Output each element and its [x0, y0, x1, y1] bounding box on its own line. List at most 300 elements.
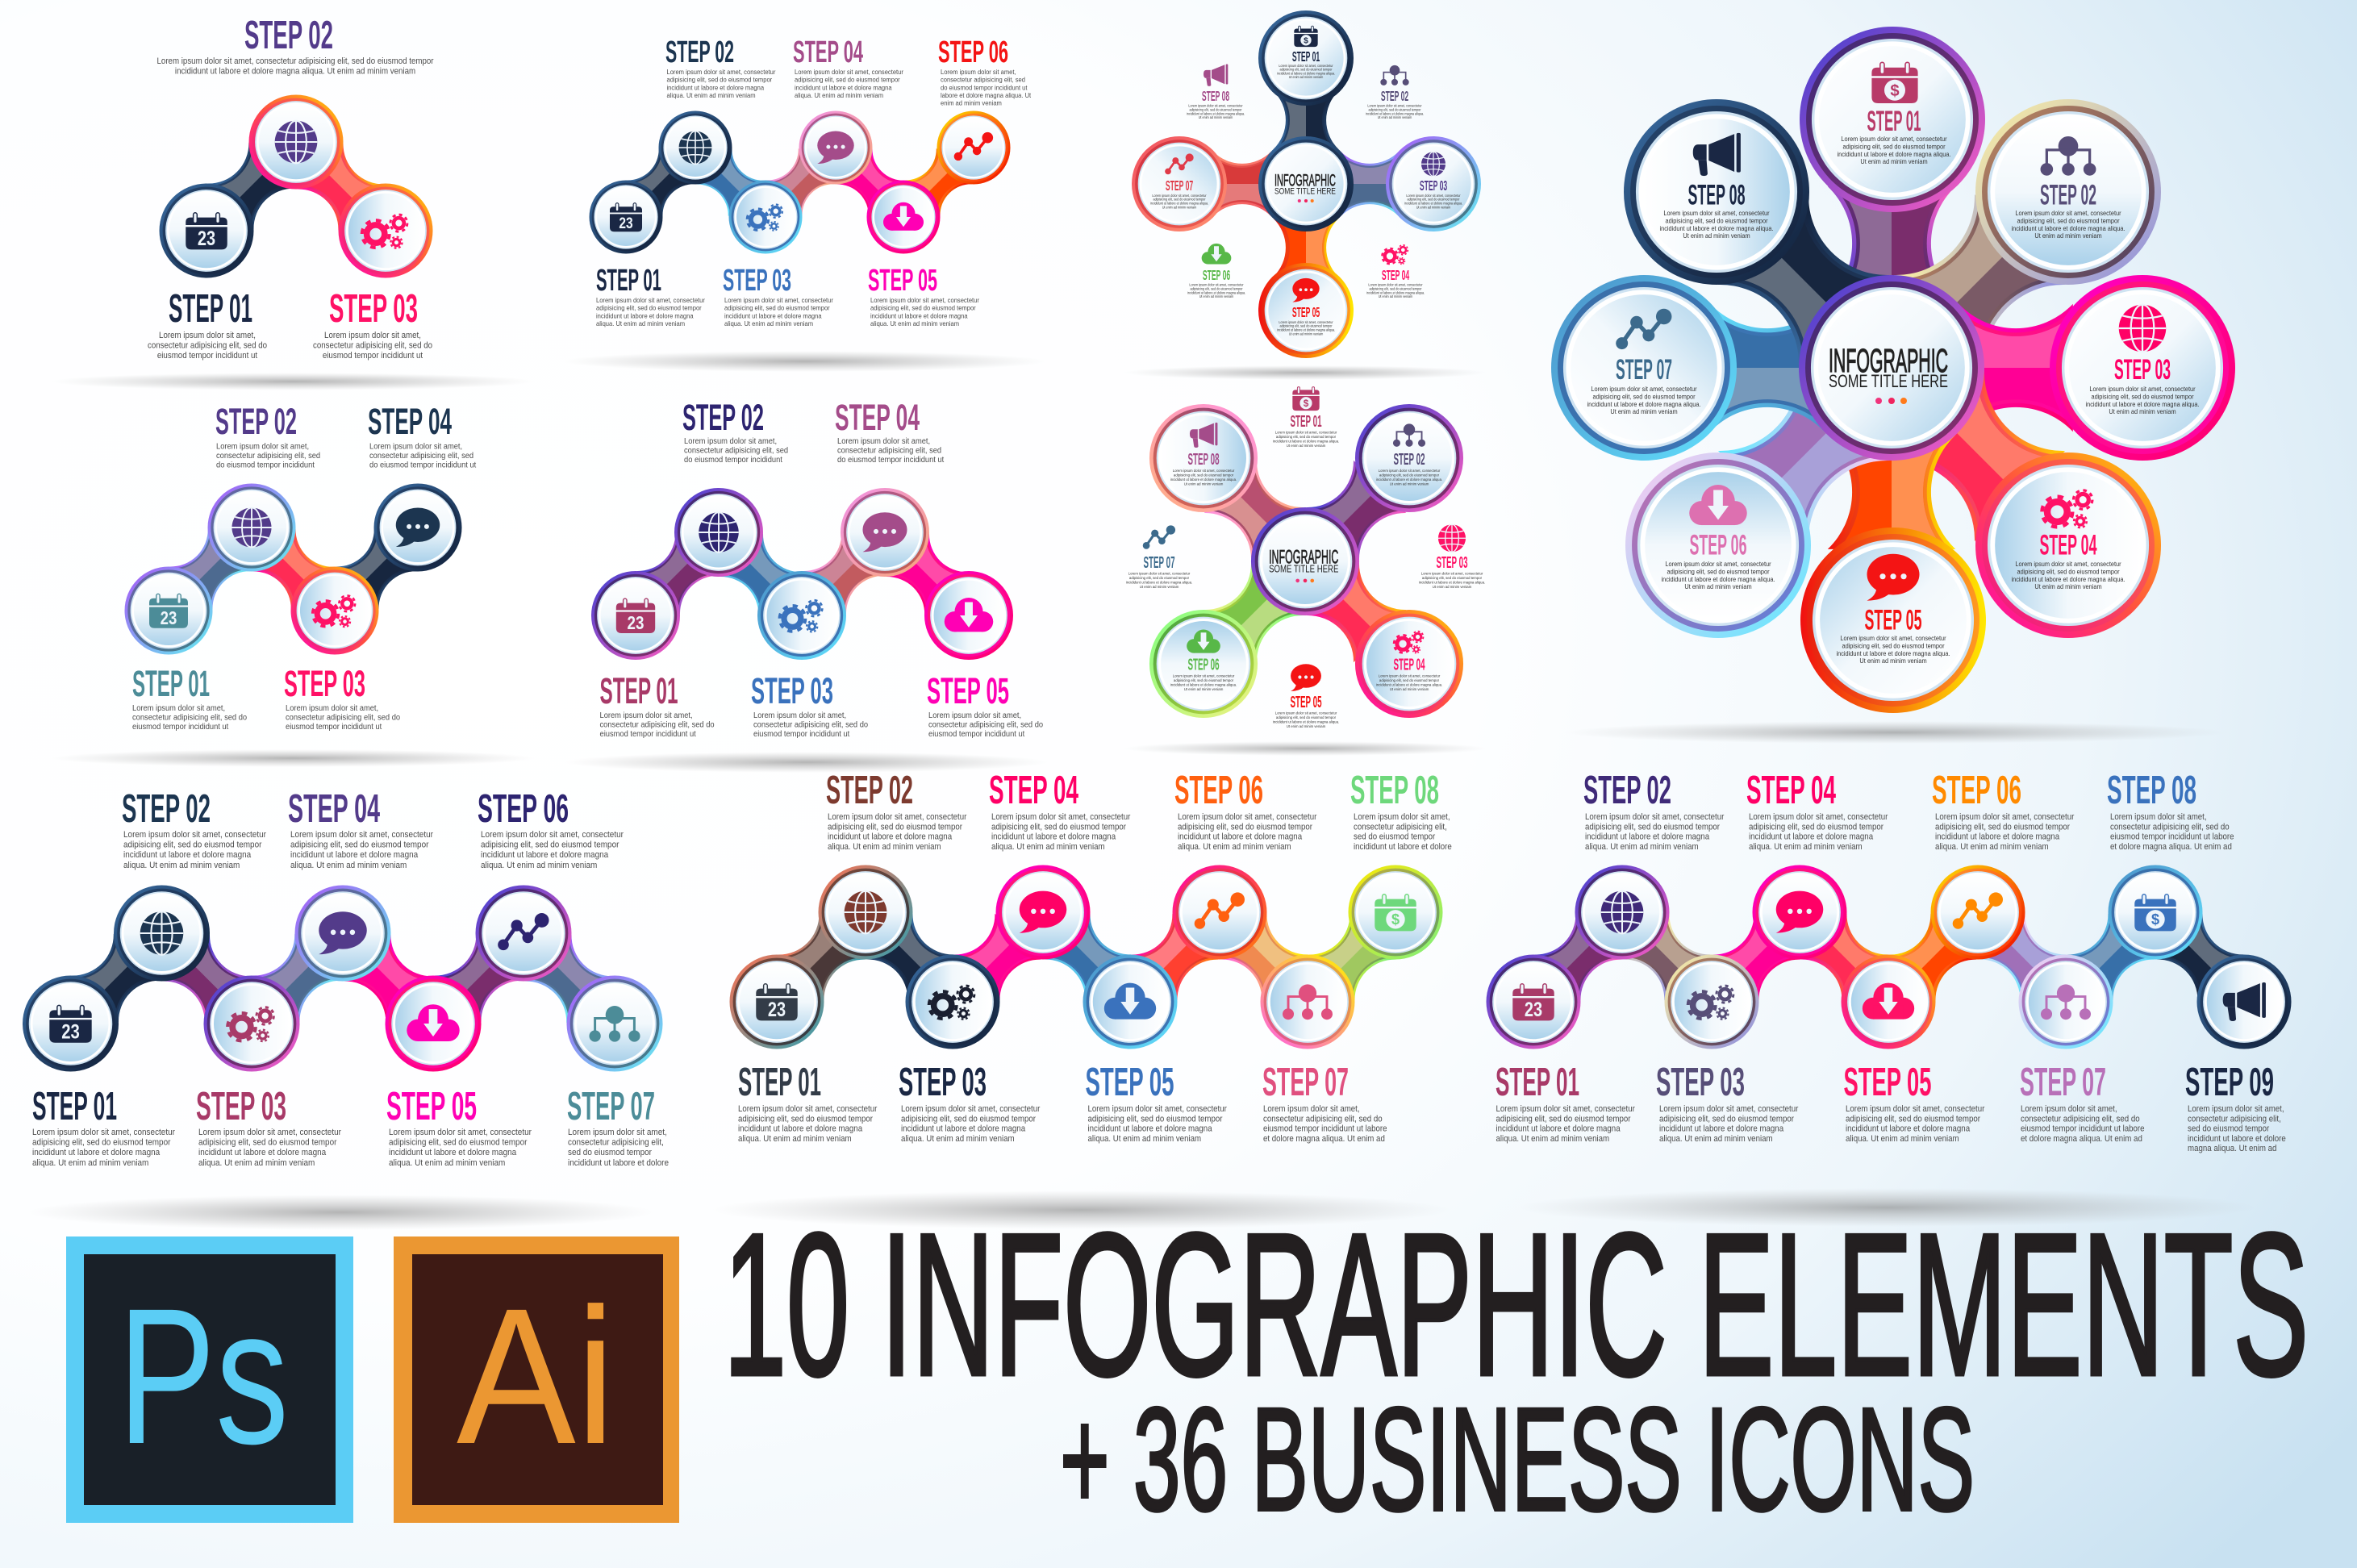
step 07: et dolore magna aliqua. Ut enim ad [2021, 1134, 2142, 1144]
step 04: STEP 04 [835, 397, 920, 438]
step 05: aliqua. Ut enim ad minim veniam [389, 1158, 506, 1168]
node: step 03: Lorem ipsum dolor sit amet, consectetur [2089, 386, 2196, 393]
node: step 08 [1149, 404, 1258, 512]
step 08: et dolore magna aliqua. Ut enim ad [2110, 842, 2232, 852]
connectors [206, 141, 386, 231]
node: gears [905, 955, 1000, 1049]
node: step 03: adipisicing elit, sed do eiusmod tempor [2091, 393, 2194, 401]
node: dollar calendar [2109, 865, 2202, 960]
node: step 04 [1355, 610, 1463, 718]
node: step 01 [1258, 10, 1354, 106]
step 07: consectetur adipisicing elit, sed do [1263, 1115, 1383, 1124]
step 02: STEP 02 [122, 786, 211, 831]
outer step 07 [1126, 525, 1192, 589]
outer step 05: adipisicing elit, sed do eiusmod tempor [1276, 715, 1337, 719]
step 07 [567, 1084, 669, 1168]
node: step 06: Ut enim ad minim veniam [1184, 687, 1223, 691]
step 06: Lorem ipsum dolor sit amet, [941, 69, 1016, 76]
outer step 03: Ut enim ad minim veniam [1433, 585, 1471, 589]
outer step 07: Ut enim ad minim veniam [1140, 585, 1178, 589]
step 02: do eiusmod tempor incididunt [684, 456, 782, 465]
step 01: STEP 01 [600, 670, 678, 711]
outer step 01: incididunt ut labore et dolore magna aliqua. [1273, 439, 1339, 444]
node: step 04: incididunt ut labore et dolore magna aliqua. [2011, 575, 2125, 583]
step 01: Lorem ipsum dolor sit amet, consectetur [738, 1105, 878, 1114]
step 04: adipisicing elit, sed do eiusmod tempor [1749, 823, 1884, 832]
step 03 [899, 1060, 1041, 1144]
step 09: consectetur adipisicing elit, [2188, 1115, 2281, 1124]
icon: Illustrator badge: Ai [457, 1268, 615, 1484]
node: calendar [1486, 955, 1581, 1049]
node: cloud [1083, 955, 1178, 1049]
step 02: adipisicing elit, sed do eiusmod tempor [666, 76, 772, 84]
node: bubble [841, 488, 929, 577]
outer step 04: Lorem ipsum dolor sit amet, consectetur [1368, 282, 1423, 287]
step 01: adipisicing elit, sed do eiusmod tempor [32, 1138, 171, 1148]
step 02: consectetur adipisicing elit, sed [216, 452, 320, 461]
step 04: incididunt ut labore et dolore magna [1749, 832, 1873, 842]
step 02: Lorem ipsum dolor sit amet, [216, 442, 309, 452]
step 06: adipisicing elit, sed do eiusmod tempor [1178, 823, 1313, 832]
step 04: STEP 04 [288, 786, 380, 831]
step 02 [826, 768, 967, 852]
step 02 [122, 786, 266, 870]
step 04: adipisicing elit, sed do eiusmod tempor [795, 76, 900, 84]
node: step 06: STEP 06 [1187, 657, 1220, 674]
outer step 06: STEP 06 [1203, 267, 1230, 283]
step 05: aliqua. Ut enim ad minim veniam [870, 320, 959, 327]
outer step 02: incididunt ut labore et dolore magna aliqua. [1366, 111, 1424, 115]
step 01: Lorem ipsum dolor sit amet, [132, 704, 225, 713]
step 03: consectetur adipisicing elit, sed do [753, 720, 869, 730]
step 02: STEP 02 [665, 35, 734, 69]
node: step 05: incididunt ut labore et dolore magna aliqua. [1277, 327, 1335, 332]
node: step 06: adipisicing elit, sed do eiusmod tempor [1667, 568, 1770, 576]
node: cloud [924, 571, 1013, 660]
step 03: adipisicing elit, sed do eiusmod tempor [724, 304, 830, 312]
step 05 [386, 1084, 532, 1168]
outer step 05: STEP 05 [1290, 694, 1322, 711]
outer step 08 [1187, 65, 1245, 119]
step 01: eiusmod tempor incididunt ut [132, 723, 228, 732]
node: step 08: Ut enim ad minim veniam [1683, 232, 1750, 240]
node: step 04 [1975, 452, 2161, 638]
step 06 [938, 35, 1032, 107]
step 06 [1932, 768, 2075, 852]
step 03: aliqua. Ut enim ad minim veniam [1659, 1134, 1773, 1144]
node: calendar: 23 [61, 1020, 80, 1043]
step 05 [868, 264, 979, 327]
step 01: STEP 01 [1496, 1060, 1579, 1104]
node: step 05: STEP 05 [1865, 605, 1921, 636]
outer step 05: Ut enim ad minim veniam [1287, 724, 1325, 728]
step 01: incididunt ut labore et dolore magna [32, 1149, 160, 1157]
node: step 05: STEP 05 [1292, 304, 1320, 320]
node: step 02: Ut enim ad minim veniam [1390, 482, 1429, 486]
node: step 08: incididunt ut labore et dolore magna aliqua. [1659, 224, 1774, 232]
step 02: aliqua. Ut enim ad minim veniam [1585, 842, 1699, 852]
step 04: consectetur adipisicing elit, sed [837, 446, 941, 456]
step 08: Lorem ipsum dolor sit amet, [2110, 813, 2207, 822]
step 01: incididunt ut labore et dolore magna [596, 312, 694, 319]
step 02: incididunt ut labore et dolore magna [828, 832, 952, 842]
step 08 [1350, 768, 1452, 852]
node: gears [757, 571, 846, 660]
step 03 [751, 670, 869, 739]
step 03: adipisicing elit, sed do eiusmod tempor [198, 1138, 337, 1148]
step 05: aliqua. Ut enim ad minim veniam [1846, 1134, 1959, 1144]
step 08 [2107, 768, 2234, 852]
step 04 [989, 768, 1131, 852]
node: step 03: Ut enim ad minim veniam [2109, 408, 2176, 415]
node: calendar [23, 976, 119, 1071]
icon: Illustrator badge [394, 1236, 679, 1523]
node: step 01: incididunt ut labore et dolore magna aliqua. [1837, 150, 1951, 158]
outer step 07: STEP 07 [1143, 554, 1175, 572]
step 06: Lorem ipsum dolor sit amet, consectetur [1935, 813, 2075, 822]
outer step 04 [1366, 245, 1425, 298]
node: gears [729, 181, 802, 253]
outer step 06 [1187, 244, 1245, 298]
step 01 [596, 264, 705, 327]
step 08: STEP 08 [1350, 768, 1439, 812]
step 06: adipisicing elit, sed do eiusmod tempor [481, 840, 619, 850]
step 03: aliqua. Ut enim ad minim veniam [198, 1158, 315, 1168]
outer step 03: Lorem ipsum dolor sit amet, consectetur [1421, 572, 1483, 576]
step 09 [2185, 1060, 2286, 1153]
node: step 07: adipisicing elit, sed do eiusmod tempor [1592, 393, 1696, 401]
step 06: aliqua. Ut enim ad minim veniam [481, 861, 598, 870]
node: step 07: Lorem ipsum dolor sit amet, consectetur [1591, 386, 1697, 393]
node: step 02: Ut enim ad minim veniam [2034, 232, 2102, 240]
step 04: do eiusmod tempor incididunt ut [369, 461, 476, 470]
node: globe [658, 111, 732, 184]
step 06: incididunt ut labore et dolore magna [481, 851, 608, 860]
step 04: aliqua. Ut enim ad minim veniam [795, 92, 883, 99]
step 05: STEP 05 [1844, 1060, 1931, 1104]
step 07: STEP 07 [567, 1084, 655, 1128]
node: gears [290, 566, 379, 655]
step 05: eiusmod tempor incididunt ut [928, 730, 1024, 739]
outer step 02: STEP 02 [1381, 88, 1408, 104]
node: gears [203, 976, 300, 1071]
step 02: STEP 02 [1583, 768, 1671, 812]
outer step 04: Ut enim ad minim veniam [1379, 294, 1413, 298]
outer step 03: incididunt ut labore et dolore magna aliqua. [1419, 580, 1485, 585]
node: calendar: 23 [198, 228, 215, 250]
node: globe [674, 488, 763, 577]
node: calendar: 23 [619, 215, 633, 232]
step 02: incididunt ut labore et dolore magna [123, 851, 251, 860]
node: step 06: STEP 06 [1689, 529, 1747, 561]
outer step 05: incididunt ut labore et dolore magna aliqua. [1273, 719, 1339, 724]
outer step 04: incididunt ut labore et dolore magna aliqua. [1366, 290, 1425, 294]
node: step 04: incididunt ut labore et dolore magna aliqua. [1376, 682, 1442, 686]
outer step 07: adipisicing elit, sed do eiusmod tempor [1129, 576, 1190, 580]
outer step 01: STEP 01 [1290, 413, 1322, 431]
step 02: STEP 02 [826, 768, 913, 812]
panel: 5-step element [591, 397, 1044, 739]
outer step 05: Lorem ipsum dolor sit amet, consectetur [1275, 711, 1337, 715]
step 02: adipisicing elit, sed do eiusmod tempor [1585, 823, 1721, 832]
step 04: Lorem ipsum dolor sit amet, [369, 442, 462, 452]
step 07: eiusmod tempor incididunt ut labore [1263, 1124, 1387, 1134]
node: globe [818, 865, 913, 960]
step 01: aliqua. Ut enim ad minim veniam [1496, 1134, 1609, 1144]
step 03: consectetur adipisicing elit, sed do [286, 713, 401, 723]
node: bubble [1752, 865, 1847, 960]
step 06 [1174, 768, 1317, 852]
node: calendar: 23 [161, 607, 177, 628]
node: step 07: STEP 07 [1616, 354, 1672, 386]
panel: 3-step element [148, 13, 434, 361]
step 04: STEP 04 [793, 35, 863, 69]
step 02: aliqua. Ut enim ad minim veniam [828, 842, 941, 852]
step 02: incididunt ut labore et dolore magna [1585, 832, 1709, 842]
step 04: consectetur adipisicing elit, sed [369, 452, 473, 461]
step 06: STEP 06 [1932, 768, 2021, 812]
outer step 01: Ut enim ad minim veniam [1287, 444, 1325, 448]
outer step 08: Lorem ipsum dolor sit amet, consectetur [1188, 103, 1243, 108]
step 05: aliqua. Ut enim ad minim veniam [1087, 1134, 1201, 1144]
step 01: Lorem ipsum dolor sit amet, consectetur [1496, 1105, 1635, 1114]
step 04 [1746, 768, 1888, 852]
node: step 04: Lorem ipsum dolor sit amet, consectetur [2015, 561, 2121, 568]
central hub: SOME TITLE HERE [1274, 186, 1336, 196]
node: step 07: Ut enim ad minim veniam [1610, 408, 1678, 415]
node: step 03: adipisicing elit, sed do eiusmod tempor [1407, 197, 1460, 202]
step 05: Lorem ipsum dolor sit amet, [928, 711, 1021, 720]
node: chart [937, 111, 1010, 184]
node: calendar [729, 955, 824, 1049]
central hub [1799, 275, 1984, 461]
step 04 [368, 401, 476, 470]
outer step 08: adipisicing elit, sed do eiusmod tempor [1189, 107, 1242, 112]
step 06: consectetur adipisicing elit, sed [941, 76, 1025, 84]
panel: radial element with four rings [1132, 10, 1481, 358]
step 02 heading: STEP 02 [244, 13, 333, 57]
step 05: Lorem ipsum dolor sit amet, consectetur [870, 297, 979, 304]
node: bubble [374, 484, 461, 571]
node: step 01: Ut enim ad minim veniam [1289, 75, 1324, 79]
connectors [1707, 183, 2076, 553]
step 03 text: Lorem ipsum dolor sit amet, [324, 332, 421, 340]
central hub: INFOGRAPHIC [1269, 547, 1338, 568]
step 06: STEP 06 [1174, 768, 1263, 812]
node: chart [476, 886, 571, 981]
outer step 04: adipisicing elit, sed do eiusmod tempor [1369, 286, 1422, 291]
panel: large radial element [1551, 27, 2235, 713]
step 03 [1656, 1060, 1799, 1144]
outer step 01: Lorem ipsum dolor sit amet, consectetur [1275, 431, 1337, 435]
outer step 08: Ut enim ad minim veniam [1199, 115, 1233, 119]
node: bubble [295, 886, 390, 981]
step 01: Lorem ipsum dolor sit amet, consectetur [596, 297, 705, 304]
node: step 07: Lorem ipsum dolor sit amet, consectetur [1152, 194, 1207, 198]
node: globe [114, 886, 210, 981]
node: step 05: adipisicing elit, sed do eiusmod tempor [1842, 642, 1945, 650]
node: step 07: STEP 07 [1166, 177, 1193, 194]
outer step 03: adipisicing elit, sed do eiusmod tempor [1422, 576, 1483, 580]
step 05: incididunt ut labore et dolore magna [1087, 1124, 1212, 1134]
panel: 7-step element [23, 786, 669, 1168]
node: gears [1665, 955, 1758, 1049]
step 07: consectetur adipisicing elit, [568, 1138, 664, 1148]
step 01: Lorem ipsum dolor sit amet, consectetur [32, 1128, 175, 1137]
step 03: eiusmod tempor incididunt ut [753, 730, 849, 739]
step 02 [665, 35, 776, 99]
outer step 02: Ut enim ad minim veniam [1378, 115, 1412, 119]
step 02 [682, 397, 788, 465]
connectors [71, 932, 615, 1024]
step 03: STEP 03 [751, 670, 833, 711]
step 02: Lorem ipsum dolor sit amet, consectetur [123, 831, 266, 840]
floor shadows [28, 351, 2255, 1230]
outer step 07: Lorem ipsum dolor sit amet, consectetur [1128, 572, 1191, 576]
connectors [636, 532, 969, 616]
node: step 08: Ut enim ad minim veniam [1184, 482, 1223, 486]
node: step 04: adipisicing elit, sed do eiusmod tempor [1379, 678, 1440, 682]
node: org chart [566, 976, 663, 1071]
step 07: Lorem ipsum dolor sit amet, [2021, 1105, 2117, 1114]
step 05: STEP 05 [386, 1084, 477, 1128]
step 01 [32, 1084, 175, 1168]
step 03: aliqua. Ut enim ad minim veniam [901, 1134, 1015, 1144]
node: step 02: adipisicing elit, sed do eiusmod tempor [1379, 473, 1440, 477]
step 01: adipisicing elit, sed do eiusmod tempor [738, 1115, 874, 1124]
step 01: incididunt ut labore et dolore magna [1496, 1124, 1621, 1134]
step 08: consectetur adipisicing elit, [1354, 823, 1447, 832]
step 01: STEP 01 [132, 663, 210, 704]
step 09: sed do eiusmod tempor [2188, 1124, 2270, 1134]
node: step 04: STEP 04 [1393, 657, 1425, 674]
step 03: adipisicing elit, sed do eiusmod tempor [901, 1115, 1037, 1124]
node: bubble [799, 111, 873, 184]
step 03: incididunt ut labore et dolore magna [724, 312, 822, 319]
node: bubble [995, 865, 1091, 960]
node: step 05: Ut enim ad minim veniam [1859, 657, 1927, 665]
node: step 02: STEP 02 [1393, 451, 1425, 469]
node: step 01: adipisicing elit, sed do eiusmod tempor [1279, 67, 1333, 72]
connectors [1212, 90, 1400, 278]
node: step 06: incididunt ut labore et dolore magna aliqua. [1661, 575, 1775, 583]
step 06: Lorem ipsum dolor sit amet, consectetur [481, 831, 624, 840]
step 06: incididunt ut labore et dolore magna [1935, 832, 2059, 842]
step 02 [1583, 768, 1725, 852]
node: step 03: incididunt ut labore et dolore magna aliqua. [2085, 400, 2200, 408]
node: step 02: Lorem ipsum dolor sit amet, consectetur [1379, 469, 1441, 473]
node: step 06: Lorem ipsum dolor sit amet, consectetur [1173, 673, 1235, 678]
step 07: STEP 07 [2020, 1060, 2106, 1104]
step 08: STEP 08 [2107, 768, 2196, 812]
connectors [626, 148, 973, 217]
node: step 07: incididunt ut labore et dolore magna aliqua. [1150, 201, 1208, 206]
node: step 06 [1149, 610, 1258, 718]
step 06: enim ad minim veniam [941, 99, 1002, 107]
node: step 07 [1551, 275, 1737, 461]
node: step 01: STEP 01 [1292, 48, 1320, 65]
panel: 8-step element [729, 768, 1452, 1144]
step 01: consectetur adipisicing elit, sed do [600, 720, 715, 730]
step 04: adipisicing elit, sed do eiusmod tempor [991, 823, 1127, 832]
node: step 03: STEP 03 [1420, 177, 1447, 194]
node: step 03 [1386, 136, 1481, 231]
node: step 08: Lorem ipsum dolor sit amet, consectetur [1663, 210, 1770, 217]
step 05 [927, 670, 1044, 739]
outer step 02: adipisicing elit, sed do eiusmod tempor [1368, 107, 1421, 112]
step 05: consectetur adipisicing elit, sed do [928, 720, 1044, 730]
step 05: Lorem ipsum dolor sit amet, consectetur [1846, 1105, 1985, 1114]
outer step 02 [1366, 65, 1424, 119]
step 02 text: Lorem ipsum dolor sit amet, consectetur adipisicing elit, sed do eiusmod tempor [157, 57, 434, 66]
step 05: incididunt ut labore et dolore magna [870, 312, 968, 319]
step 06: incididunt ut labore et dolore magna [1178, 832, 1302, 842]
step 08: sed do eiusmod tempor [1354, 832, 1436, 842]
step 02: incididunt ut labore et dolore magna [666, 84, 765, 91]
step 04: STEP 04 [989, 768, 1078, 812]
step 02: aliqua. Ut enim ad minim veniam [666, 92, 756, 99]
step 05: STEP 05 [868, 264, 937, 298]
step 04: aliqua. Ut enim ad minim veniam [290, 861, 407, 870]
step 06: Lorem ipsum dolor sit amet, consectetur [1178, 813, 1317, 822]
step 04: incididunt ut labore et dolore magna [991, 832, 1116, 842]
step 01: STEP 01 [32, 1084, 117, 1128]
step 04: STEP 04 [368, 401, 452, 442]
node: step 04: Lorem ipsum dolor sit amet, consectetur [1379, 673, 1441, 678]
step 05: STEP 05 [1086, 1060, 1174, 1104]
step 06: labore et dolore magna aliqua. Ut [941, 92, 1032, 99]
node: calendar [124, 566, 213, 655]
step 05: adipisicing elit, sed do eiusmod tempor [870, 304, 976, 312]
step 03: STEP 03 [1656, 1060, 1745, 1104]
node: step 05: Ut enim ad minim veniam [1289, 332, 1324, 336]
connectors [1533, 912, 2245, 1002]
outer step 03 [1419, 524, 1485, 589]
node: step 01: STEP 01 [1867, 106, 1921, 137]
step 03: Lorem ipsum dolor sit amet, consectetur [901, 1105, 1041, 1114]
node: step 02 [1355, 404, 1463, 512]
node: step 01: Lorem ipsum dolor sit amet, consectetur [1841, 136, 1947, 143]
node: dollar calendar [1349, 865, 1442, 960]
node: step 02 [1975, 99, 2161, 285]
step 01: adipisicing elit, sed do eiusmod tempor [596, 304, 702, 312]
node: step 08: STEP 08 [1687, 179, 1746, 211]
node: step 03: incididunt ut labore et dolore magna aliqua. [1404, 201, 1462, 206]
step 09: Lorem ipsum dolor sit amet, [2188, 1105, 2284, 1114]
node: megaphone [2197, 955, 2291, 1049]
outer step 06: incididunt ut labore et dolore magna aliqua. [1187, 290, 1245, 294]
step 03 [284, 663, 401, 732]
step 06: aliqua. Ut enim ad minim veniam [1178, 842, 1291, 852]
step 01: aliqua. Ut enim ad minim veniam [32, 1158, 149, 1168]
icon: Photoshop badge [66, 1236, 353, 1523]
node: step 04: Ut enim ad minim veniam [1390, 687, 1429, 691]
step 09: incididunt ut labore et dolore [2188, 1134, 2286, 1144]
step 04: adipisicing elit, sed do eiusmod tempor [290, 840, 429, 850]
node: step 02: incididunt ut labore et dolore magna aliqua. [2011, 224, 2125, 232]
step 03: STEP 03 [196, 1084, 286, 1128]
step 04: Lorem ipsum dolor sit amet, consectetur [795, 69, 903, 76]
step 01: consectetur adipisicing elit, sed do [132, 713, 248, 723]
step 04: STEP 04 [1746, 768, 1836, 812]
node: calendar [160, 184, 253, 277]
outer step 05 [1273, 664, 1339, 728]
step 07: STEP 07 [1262, 1060, 1349, 1104]
outer step 07: incididunt ut labore et dolore magna aliqua. [1126, 580, 1192, 585]
step 01 text: eiusmod tempor incididunt ut [157, 352, 257, 361]
step 02: do eiusmod tempor incididunt [216, 461, 315, 470]
step 02: STEP 02 [682, 397, 764, 438]
